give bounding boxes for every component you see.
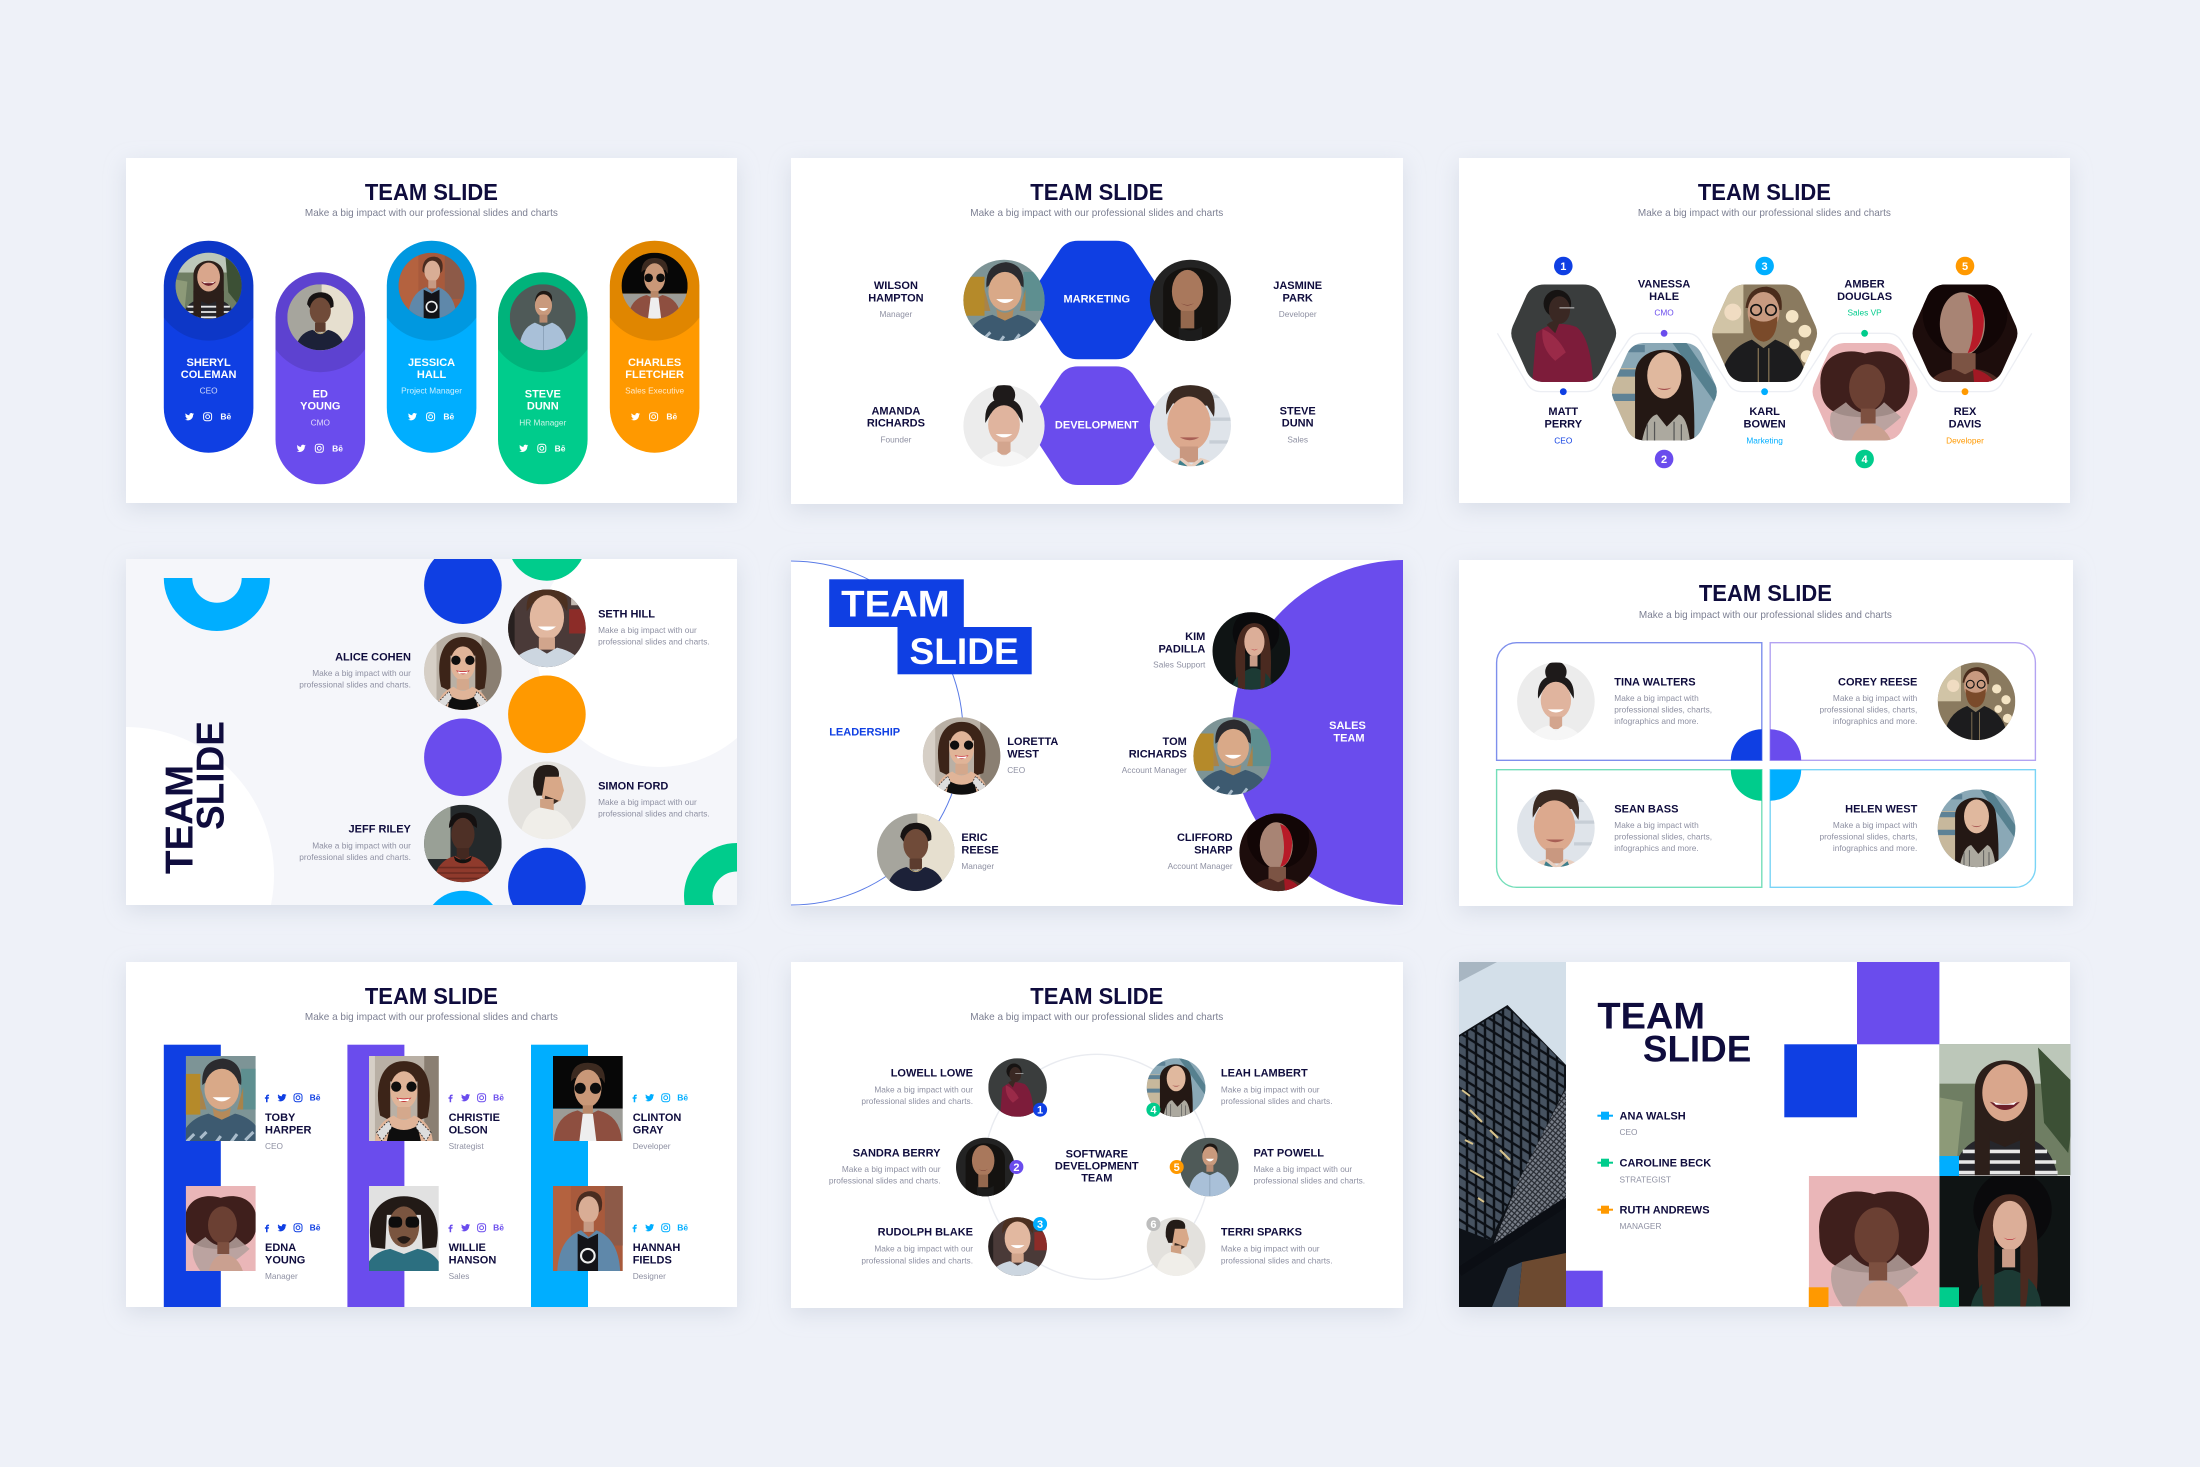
text: Eric Reese bbox=[961, 832, 999, 871]
text: Amber Douglas: DOUGLAS bbox=[1837, 291, 1892, 303]
member: Hannah Fields: Designer bbox=[633, 1271, 666, 1281]
hexagon: development bbox=[1027, 366, 1167, 485]
text: Simon Ford: SIMON FORD bbox=[598, 781, 668, 793]
text: Jasmine Park bbox=[1273, 280, 1322, 319]
vertical title bbox=[158, 721, 232, 874]
text: Amanda Richards bbox=[867, 405, 925, 445]
text: Simon Ford bbox=[598, 781, 710, 819]
member 1: Lowell Lowe: Make a big impact with our bbox=[874, 1084, 973, 1094]
text: Tom Richards: Account Manager bbox=[1122, 765, 1187, 775]
photo: Jeff Riley bbox=[424, 805, 502, 882]
text: Seth Hill: SETH HILL bbox=[598, 609, 655, 621]
text: Jasmine Park: Developer bbox=[1279, 309, 1317, 319]
list item: Caroline Beck: STRATEGIST bbox=[1620, 1174, 1671, 1184]
panel: four cards bbox=[1459, 560, 2073, 906]
text: Jasmine Park: JASMINE bbox=[1273, 280, 1322, 292]
title: TEAM SLIDE bbox=[1030, 179, 1163, 205]
hexagon: marketing bbox=[1027, 241, 1167, 359]
decorative shapes and circles bbox=[126, 559, 737, 905]
markers: connector dots bbox=[1560, 330, 1968, 395]
pill: Jessica Hall: HALL bbox=[417, 369, 447, 381]
text: Clifford Sharp: SHARP bbox=[1194, 844, 1233, 856]
photo: Wilson Hampton bbox=[963, 260, 1045, 341]
accent: sky square bbox=[1939, 1156, 1959, 1176]
pill: Jessica Hall bbox=[387, 241, 476, 453]
text: Alice Cohen bbox=[299, 652, 411, 690]
text: Steve Dunn: Sales bbox=[1287, 435, 1308, 445]
member 4: Leah Lambert bbox=[1136, 1048, 1333, 1128]
member 2: Sandra Berry: Make a big impact with our bbox=[842, 1164, 941, 1174]
text: Steve Dunn bbox=[1280, 405, 1316, 445]
card: Tina Walters: Make a big impact with bbox=[1614, 693, 1699, 703]
text: Seth Hill bbox=[598, 609, 710, 646]
badge 4: 4 bbox=[1862, 454, 1869, 466]
photo: Jasmine Park bbox=[1150, 260, 1231, 341]
photo: Vanessa Hale bbox=[1612, 343, 1717, 440]
pill: Ed Young: YOUNG bbox=[300, 401, 340, 413]
member 6: Terri Sparks: Make a big impact with our bbox=[1221, 1244, 1320, 1254]
title: TEAM SLIDE bbox=[1698, 179, 1831, 205]
text: Loretta West: CEO bbox=[1007, 765, 1026, 775]
pill: Steve Dunn: HR Manager bbox=[519, 417, 567, 427]
pill: Sheryl Coleman bbox=[163, 241, 254, 453]
text: Kim Padilla: KIM bbox=[1185, 631, 1205, 643]
pill: Jessica Hall: Project Manager bbox=[401, 386, 462, 396]
badge 5: 5 bbox=[1962, 261, 1968, 273]
member: Edna Young: Bē bbox=[310, 1223, 321, 1233]
card: Sean Bass: SEAN BASS bbox=[1614, 803, 1678, 815]
text: Wilson Hampton: HAMPTON bbox=[868, 292, 924, 304]
text: Simon Ford: Make a big impact with our bbox=[598, 797, 697, 807]
title: TEAM SLIDE bbox=[365, 179, 498, 205]
pill: Steve Dunn bbox=[498, 272, 588, 484]
photo: Steve Dunn bbox=[1150, 385, 1231, 466]
card: Corey Reese: Make a big impact with bbox=[1833, 693, 1918, 703]
photo: Alice Cohen bbox=[424, 632, 502, 710]
badge 3: 3 bbox=[1762, 261, 1768, 273]
photo: Seth Hill bbox=[508, 590, 586, 668]
card: Corey Reese: professional slides, charts, bbox=[1820, 704, 1917, 714]
pill: Charles Fletcher: CHARLES bbox=[628, 357, 681, 369]
text: Wilson Hampton bbox=[868, 280, 924, 319]
text: Tom Richards bbox=[1122, 736, 1187, 775]
photo: Amanda Richards bbox=[964, 385, 1045, 466]
text: Karl Bowen bbox=[1744, 406, 1786, 445]
title block: SLIDE: SLIDE bbox=[910, 631, 1019, 672]
text: Simon Ford: professional slides and charts. bbox=[598, 809, 710, 819]
member: Clinton Gray: CLINTON bbox=[633, 1112, 681, 1124]
member 4: Leah Lambert: Make a big impact with our bbox=[1221, 1084, 1320, 1094]
member: Clinton Gray: Bē bbox=[677, 1093, 688, 1103]
member: Hannah Fields: HANNAH bbox=[633, 1242, 680, 1254]
panel: team slide hexagon timeline bbox=[1459, 158, 2070, 503]
pill: Jessica Hall: Bē bbox=[443, 412, 455, 422]
member: Hannah Fields: Bē bbox=[677, 1223, 688, 1233]
panel: building and squares bbox=[1459, 962, 2095, 1307]
photo: Matt Perry bbox=[1511, 280, 1617, 386]
member: Edna Young bbox=[178, 1186, 321, 1281]
column bar: purple bbox=[347, 1045, 404, 1307]
text: Eric Reese: Manager bbox=[961, 861, 994, 871]
panel: three column team grid bbox=[126, 962, 737, 1307]
label: sales team: TEAM bbox=[1333, 732, 1365, 744]
text: Matt Perry: PERRY bbox=[1545, 419, 1583, 431]
badge 1 bbox=[1554, 257, 1573, 275]
pill: Sheryl Coleman: CEO bbox=[200, 386, 218, 396]
member: Christie Olson bbox=[361, 1056, 504, 1151]
text: Amanda Richards: RICHARDS bbox=[867, 418, 925, 430]
badge 5 bbox=[1956, 257, 1974, 275]
square: purple bottom bbox=[1566, 1271, 1603, 1307]
title: TEAM SLIDE bbox=[365, 983, 498, 1009]
title bbox=[1597, 995, 1751, 1070]
member 4: Leah Lambert: LEAH LAMBERT bbox=[1221, 1068, 1308, 1080]
member 3: Rudolph Blake bbox=[861, 1202, 1063, 1293]
photo: Clifford Sharp bbox=[1239, 814, 1317, 892]
panel: team slide departments bbox=[791, 158, 1403, 504]
panel: software development team ring bbox=[791, 962, 1403, 1308]
vertical title: TEAM bbox=[158, 765, 201, 874]
text: Tom Richards: TOM bbox=[1163, 736, 1187, 748]
text: Steve Dunn: STEVE bbox=[1280, 405, 1316, 417]
text: Karl Bowen: BOWEN bbox=[1744, 419, 1786, 431]
member 5: Pat Powell: Make a big impact with our bbox=[1254, 1164, 1352, 1174]
text: Rex Davis: Developer bbox=[1946, 435, 1984, 445]
member: Toby Harper bbox=[186, 1056, 320, 1149]
square: blue bbox=[1784, 1044, 1857, 1117]
text: Kim Padilla bbox=[1153, 631, 1206, 670]
member: Christie Olson: Strategist bbox=[449, 1141, 484, 1151]
badge 4 bbox=[1855, 450, 1874, 468]
photo: curly hair woman bbox=[1809, 1176, 1939, 1307]
member 6: Terri Sparks: professional slides and charts. bbox=[1221, 1255, 1333, 1265]
photo: Kim Padilla bbox=[1212, 609, 1290, 690]
card: Helen West: HELEN WEST bbox=[1845, 803, 1918, 815]
vertical title: SLIDE bbox=[189, 721, 232, 830]
pill: Charles Fletcher: FLETCHER bbox=[625, 369, 684, 381]
card: Corey Reese: COREY REESE bbox=[1838, 676, 1917, 688]
member 3: Rudolph Blake: 3 bbox=[1037, 1219, 1043, 1231]
photo: laughing woman bbox=[1915, 1020, 2095, 1201]
photo: Amber Douglas bbox=[1812, 339, 1918, 445]
member 4: Leah Lambert: professional slides and charts. bbox=[1221, 1096, 1333, 1106]
member 3: Rudolph Blake: Make a big impact with our bbox=[874, 1244, 973, 1254]
member 1: Lowell Lowe: professional slides and charts. bbox=[861, 1096, 973, 1106]
shape: sales team semicircle and leadership arc bbox=[791, 560, 1403, 906]
photo: Tom Richards bbox=[1193, 717, 1271, 795]
text: Clifford Sharp: CLIFFORD bbox=[1177, 832, 1233, 844]
text: Rex Davis: REX bbox=[1954, 406, 1977, 418]
card: Sean Bass: Make a big impact with bbox=[1614, 820, 1699, 830]
list item: Ana Walsh: ANA WALSH bbox=[1620, 1110, 1686, 1122]
title: TEAM SLIDE bbox=[1030, 983, 1163, 1009]
card: Sean Bass: infographics and more. bbox=[1614, 843, 1699, 853]
list item: Ruth Andrews: RUTH ANDREWS bbox=[1620, 1205, 1710, 1217]
card: Tina Walters bbox=[1497, 643, 1762, 760]
list item: Ruth Andrews: MANAGER bbox=[1620, 1221, 1661, 1231]
text: Jeff Riley: JEFF RILEY bbox=[349, 824, 412, 836]
pill: Steve Dunn: STEVE bbox=[525, 389, 561, 401]
text: Rex Davis bbox=[1946, 406, 1984, 445]
list item: Ruth Andrews bbox=[1597, 1205, 1710, 1231]
text: Wilson Hampton: WILSON bbox=[874, 280, 918, 292]
text: Matt Perry: MATT bbox=[1548, 406, 1578, 418]
member: Clinton Gray: GRAY bbox=[633, 1124, 664, 1136]
card: Corey Reese bbox=[1770, 643, 2035, 760]
member: Toby Harper: CEO bbox=[265, 1141, 284, 1151]
photo: Simon Ford bbox=[508, 762, 586, 840]
text: Seth Hill: professional slides and charts. bbox=[598, 636, 710, 646]
accent: green square bbox=[1939, 1287, 1959, 1307]
member 1: Lowell Lowe: 1 bbox=[1037, 1104, 1043, 1116]
card: Tina Walters: TINA WALTERS bbox=[1614, 676, 1696, 688]
member 1: Lowell Lowe: LOWELL LOWE bbox=[891, 1068, 973, 1080]
subtitle: Make a big impact with our professional slides and charts bbox=[1638, 207, 1891, 219]
text: Amber Douglas bbox=[1837, 279, 1892, 318]
title block: TEAM bbox=[829, 579, 964, 627]
card: Tina Walters: infographics and more. bbox=[1614, 716, 1699, 726]
text: Alice Cohen: professional slides and charts. bbox=[299, 680, 411, 690]
card: Helen West: infographics and more. bbox=[1833, 843, 1917, 853]
pill: Steve Dunn: Bē bbox=[555, 443, 566, 453]
member 5: Pat Powell bbox=[1170, 1138, 1365, 1196]
text: Matt Perry: CEO bbox=[1554, 435, 1573, 445]
text: Kim Padilla: PADILLA bbox=[1158, 643, 1205, 655]
member 5: Pat Powell: 5 bbox=[1174, 1162, 1180, 1174]
text: Amanda Richards: Founder bbox=[880, 435, 912, 445]
member 1: Lowell Lowe bbox=[861, 1058, 1047, 1117]
pill: Steve Dunn: DUNN bbox=[527, 401, 559, 413]
member: Christie Olson: OLSON bbox=[449, 1124, 488, 1136]
card: Sean Bass: professional slides, charts, bbox=[1614, 832, 1712, 842]
photo: Eric Reese bbox=[877, 814, 955, 891]
member: Christie Olson: Bē bbox=[493, 1093, 504, 1103]
member 6: Terri Sparks: TERRI SPARKS bbox=[1221, 1227, 1302, 1239]
text: Wilson Hampton: Manager bbox=[880, 309, 913, 319]
pill: Charles Fletcher: Sales Executive bbox=[625, 386, 685, 396]
badge 1: 1 bbox=[1560, 261, 1566, 273]
card: Helen West: Make a big impact with bbox=[1833, 820, 1918, 830]
text: Clifford Sharp bbox=[1168, 832, 1233, 871]
member: Willie Hanson: HANSON bbox=[449, 1254, 496, 1266]
photo: skyscraper bbox=[1459, 962, 1566, 1307]
text: Karl Bowen: KARL bbox=[1749, 406, 1780, 418]
title: SLIDE bbox=[1643, 1029, 1751, 1070]
member: Willie Hanson: Sales bbox=[449, 1271, 469, 1281]
text: Steve Dunn: DUNN bbox=[1282, 418, 1314, 430]
badge 3 bbox=[1755, 257, 1774, 275]
text: Jeff Riley bbox=[299, 824, 412, 862]
center label: TEAM bbox=[1081, 1173, 1112, 1185]
text: Loretta West: LORETTA bbox=[1007, 736, 1058, 748]
list item: Ana Walsh: CEO bbox=[1620, 1127, 1638, 1137]
card: Sean Bass bbox=[1491, 768, 1762, 898]
text: Vanessa Hale: VANESSA bbox=[1638, 279, 1690, 291]
pill: Sheryl Coleman: SHERYL bbox=[186, 357, 231, 369]
member 6: Terri Sparks bbox=[1137, 1208, 1333, 1285]
text: Eric Reese: ERIC bbox=[961, 832, 988, 844]
subtitle: Make a big impact with our professional slides and charts bbox=[305, 207, 558, 219]
label: sales team: SALES bbox=[1329, 720, 1366, 732]
text: Jeff Riley: Make a big impact with our bbox=[312, 840, 411, 850]
text: Alice Cohen: ALICE COHEN bbox=[335, 652, 411, 664]
photo: Loretta West bbox=[923, 717, 1000, 795]
pill: Charles Fletcher bbox=[610, 241, 699, 453]
subtitle: Make a big impact with our professional slides and charts bbox=[970, 207, 1223, 219]
member: Edna Young: YOUNG bbox=[265, 1254, 305, 1266]
member: Hannah Fields: FIELDS bbox=[633, 1254, 672, 1266]
pill: Ed Young: CMO bbox=[311, 417, 331, 427]
list item: Caroline Beck bbox=[1597, 1157, 1711, 1184]
text: Amanda Richards: AMANDA bbox=[871, 405, 920, 417]
card: Helen West bbox=[1770, 770, 2035, 887]
panel: vertical title with circle columns bbox=[123, 559, 740, 914]
text: Loretta West bbox=[1007, 736, 1058, 775]
pill: Ed Young: Bē bbox=[332, 443, 343, 453]
subtitle: Make a big impact with our professional slides and charts bbox=[305, 1011, 558, 1023]
pill: Ed Young bbox=[276, 272, 365, 484]
ring bbox=[984, 1054, 1209, 1279]
member 5: Pat Powell: PAT POWELL bbox=[1254, 1147, 1324, 1159]
text: Amber Douglas: Sales VP bbox=[1848, 308, 1882, 318]
hexagon: marketing: MARKETING bbox=[1063, 294, 1130, 306]
title: TEAM bbox=[1597, 995, 1705, 1036]
subtitle: Make a big impact with our professional slides and charts bbox=[970, 1011, 1223, 1023]
member: Toby Harper: HARPER bbox=[265, 1124, 312, 1136]
member: Edna Young: EDNA bbox=[265, 1242, 296, 1254]
member: Toby Harper: TOBY bbox=[265, 1112, 296, 1124]
text: Jasmine Park: PARK bbox=[1283, 292, 1313, 304]
member 2: Sandra Berry: SANDRA BERRY bbox=[853, 1147, 941, 1159]
hexagon: development: DEVELOPMENT bbox=[1055, 419, 1139, 431]
pill: Charles Fletcher: Bē bbox=[666, 412, 678, 422]
pill: Sheryl Coleman: Bē bbox=[220, 412, 232, 422]
member 6: Terri Sparks: 6 bbox=[1150, 1219, 1156, 1231]
pill: Ed Young: ED bbox=[313, 389, 328, 401]
label: leadership: LEADERSHIP bbox=[829, 726, 900, 738]
member 5: Pat Powell: professional slides and charts. bbox=[1254, 1176, 1365, 1186]
member 3: Rudolph Blake: professional slides and charts. bbox=[861, 1255, 973, 1265]
text: Jeff Riley: professional slides and charts. bbox=[299, 852, 411, 862]
text: Kim Padilla: Sales Support bbox=[1153, 660, 1206, 670]
center label: DEVELOPMENT bbox=[1055, 1160, 1139, 1172]
photo: Karl Bowen bbox=[1712, 280, 1818, 386]
text: Clifford Sharp: Account Manager bbox=[1168, 861, 1233, 871]
center label: SOFTWARE bbox=[1066, 1148, 1128, 1160]
member: Clinton Gray bbox=[545, 1056, 688, 1151]
badge 2 bbox=[1655, 450, 1673, 468]
accent: orange square bbox=[1809, 1287, 1828, 1307]
pill: Sheryl Coleman: COLEMAN bbox=[181, 369, 236, 381]
column bar: blue bbox=[164, 1045, 221, 1307]
list item: Caroline Beck: CAROLINE BECK bbox=[1620, 1157, 1711, 1169]
title: TEAM SLIDE bbox=[1699, 580, 1832, 606]
member: Clinton Gray: Developer bbox=[633, 1141, 671, 1151]
badge 2: 2 bbox=[1661, 454, 1667, 466]
member: Christie Olson: CHRISTIE bbox=[449, 1112, 500, 1124]
photo: Rex Davis bbox=[1912, 284, 2018, 382]
member: Toby Harper: Bē bbox=[310, 1093, 321, 1103]
column bar: sky bbox=[531, 1045, 588, 1307]
text: Vanessa Hale: HALE bbox=[1649, 291, 1679, 303]
text: Seth Hill: Make a big impact with our bbox=[598, 625, 697, 635]
member 2: Sandra Berry bbox=[829, 1125, 1027, 1210]
text: Tom Richards: RICHARDS bbox=[1129, 748, 1187, 760]
square: purple top bbox=[1857, 962, 1939, 1044]
text: Alice Cohen: Make a big impact with our bbox=[312, 668, 411, 678]
card: Helen West: professional slides, charts, bbox=[1820, 832, 1917, 842]
text: Vanessa Hale bbox=[1638, 279, 1690, 318]
label: sales team bbox=[1329, 720, 1366, 744]
member: Willie Hanson: Bē bbox=[493, 1223, 504, 1233]
member 2: Sandra Berry: professional slides and charts. bbox=[829, 1176, 940, 1186]
photo: woman in dark bbox=[1939, 1171, 2070, 1307]
list item: Ana Walsh bbox=[1597, 1110, 1686, 1137]
member: Willie Hanson bbox=[361, 1186, 504, 1281]
text: Eric Reese: REESE bbox=[961, 844, 999, 856]
member 3: Rudolph Blake: RUDOLPH BLAKE bbox=[878, 1227, 973, 1239]
subtitle: Make a big impact with our professional slides and charts bbox=[1639, 609, 1892, 621]
panel: leadership and sales team bbox=[788, 560, 1406, 915]
title block: TEAM: TEAM bbox=[841, 584, 950, 625]
panel: team slide pills bbox=[126, 158, 737, 503]
text: Karl Bowen: Marketing bbox=[1746, 435, 1783, 445]
text: Loretta West: WEST bbox=[1007, 748, 1039, 760]
member 4: Leah Lambert: 4 bbox=[1150, 1104, 1157, 1116]
text: Matt Perry bbox=[1545, 406, 1583, 445]
card: Corey Reese: infographics and more. bbox=[1833, 716, 1917, 726]
member: Edna Young: Manager bbox=[265, 1271, 298, 1281]
member: Hannah Fields bbox=[545, 1186, 688, 1281]
text: Rex Davis: DAVIS bbox=[1949, 419, 1981, 431]
text: Amber Douglas: AMBER bbox=[1844, 279, 1885, 291]
pill: Jessica Hall: JESSICA bbox=[408, 357, 455, 369]
member: Willie Hanson: WILLIE bbox=[449, 1242, 486, 1254]
card: Tina Walters: professional slides, charts, bbox=[1614, 704, 1712, 714]
text: Vanessa Hale: CMO bbox=[1654, 308, 1674, 318]
center label bbox=[1055, 1148, 1139, 1185]
member 2: Sandra Berry: 2 bbox=[1013, 1162, 1019, 1174]
